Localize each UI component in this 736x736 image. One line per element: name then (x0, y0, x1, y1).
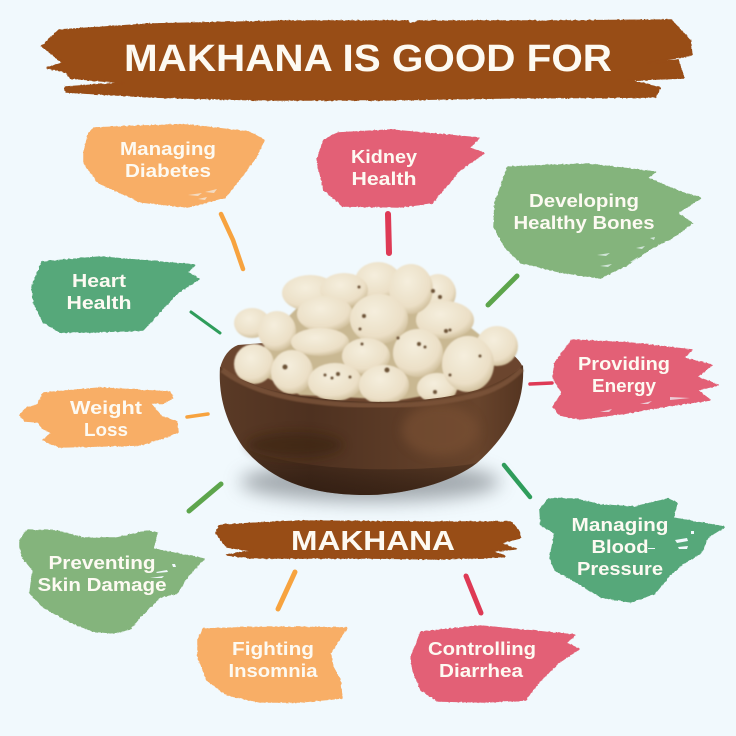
title banner (42, 20, 692, 100)
panel: developing healthy bones: Healthy Bones (514, 213, 654, 233)
panel: kidney health: Kidney (351, 147, 417, 167)
panel: fighting insomnia: Insomnia (228, 661, 319, 681)
panel: developing healthy bones (494, 164, 701, 278)
panel: fighting insomnia: Fighting (232, 639, 314, 659)
connector: diarrhea (466, 576, 481, 613)
panel: heart health: Health (66, 293, 132, 313)
bowl back and interior (220, 340, 523, 410)
connector: diabetes (221, 214, 243, 269)
panel: heart health: Heart (72, 271, 126, 291)
panel: controlling diarrhea: Diarrhea (439, 661, 524, 681)
panel: controlling diarrhea: Controlling (428, 639, 536, 659)
makhana banner: MAKHANA (291, 525, 455, 556)
panel: fighting insomnia (198, 627, 347, 702)
panel: preventing skin damage: Preventing (48, 553, 156, 573)
connector: heart (191, 312, 220, 333)
title text: MAKHANA IS GOOD FOR (124, 38, 612, 80)
panel: developing healthy bones: Developing (529, 191, 639, 211)
connector: bones (488, 276, 517, 305)
bowl body (220, 365, 523, 495)
nut specks (282, 286, 482, 394)
bowl shadow (240, 462, 500, 502)
panel: managing diabetes: Diabetes (125, 161, 211, 181)
panel: weight loss (20, 388, 178, 447)
panel: kidney health: Health (352, 169, 416, 189)
panel: providing energy (553, 340, 718, 419)
bowl of makhana (220, 262, 523, 502)
panel: preventing skin damage (20, 530, 204, 633)
panel: controlling diarrhea (411, 626, 579, 702)
panel: weight loss: Loss (84, 420, 128, 440)
connector: skin (189, 484, 221, 511)
panel: weight loss: Weight (70, 398, 142, 418)
panel: providing energy: Providing (578, 354, 670, 374)
panel: managing diabetes: Managing (120, 139, 216, 159)
makhana banner (216, 521, 520, 559)
connector: kidney (388, 214, 389, 253)
panel: managing diabetes (84, 125, 264, 207)
connector: insomnia (278, 572, 295, 609)
panel: managing blood pressure: Managing (572, 515, 668, 535)
panel: heart health (32, 257, 199, 332)
nuts (234, 262, 518, 405)
bowl grain (243, 447, 477, 495)
panel: managing blood pressure: Blood (592, 537, 648, 557)
panel: managing blood pressure: Pressure (577, 559, 663, 579)
panel: managing blood pressure (540, 499, 724, 602)
connector: energy (530, 383, 552, 384)
bowl rim highlight (222, 369, 522, 406)
panel: kidney health (317, 130, 484, 207)
connector: pressure (504, 465, 530, 497)
connector: weight (187, 414, 208, 417)
panel: preventing skin damage: Skin Damage (38, 575, 166, 595)
panel: providing energy: Energy (592, 376, 656, 396)
